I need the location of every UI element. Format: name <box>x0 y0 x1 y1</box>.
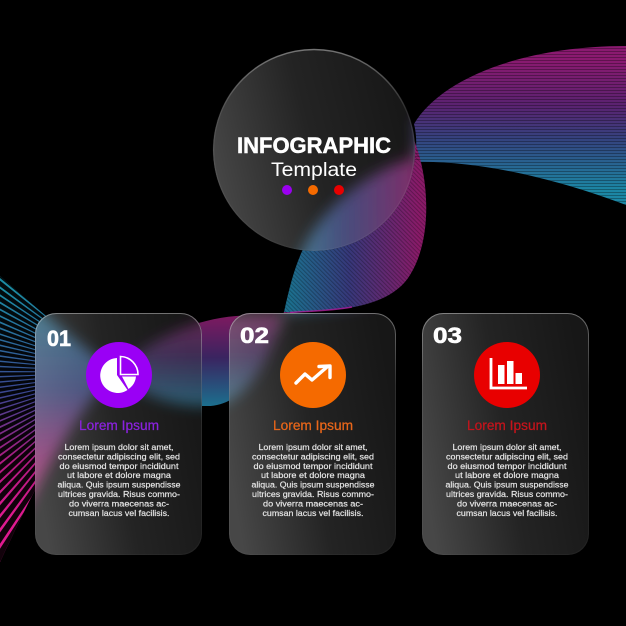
panel: card 03 <box>422 313 589 555</box>
body text: ultrices gravida. Risus commo- <box>252 489 374 499</box>
body text: do eiusmod tempor incididunt <box>60 461 179 471</box>
body text: consectetur adipiscing elit, sed <box>58 451 180 461</box>
panel: card 02 <box>229 313 396 555</box>
icon: bar chart <box>474 342 540 408</box>
body text: ut labore et dolore magna <box>67 470 171 480</box>
heading: Lorem Ipsum <box>79 417 159 433</box>
body text: ut labore et dolore magna <box>455 470 559 480</box>
body text: do eiusmod tempor incididunt <box>448 461 567 471</box>
body text <box>252 442 375 518</box>
body text: do viverra maecenas ac- <box>69 498 169 508</box>
body text: cumsan lacus vel facilisis. <box>262 508 364 518</box>
icon: pie chart <box>86 342 152 408</box>
body text: aliqua. Quis ipsum suspendisse <box>252 480 375 490</box>
body text: aliqua. Quis ipsum suspendisse <box>446 480 569 490</box>
heading: Lorem Ipsum <box>467 417 547 433</box>
panel: card 01 <box>35 313 202 555</box>
body text: consectetur adipiscing elit, sed <box>252 451 374 461</box>
body text: do viverra maecenas ac- <box>457 498 557 508</box>
body text: cumsan lacus vel facilisis. <box>456 508 558 518</box>
body text <box>446 442 569 518</box>
number 03: 03 <box>433 323 462 348</box>
heading: Lorem Ipsum <box>273 417 353 433</box>
title: INFOGRAPHIC <box>237 133 391 158</box>
body text: Lorem ipsum dolor sit amet, <box>64 442 174 452</box>
body text: aliqua. Quis ipsum suspendisse <box>58 480 181 490</box>
body text: ultrices gravida. Risus commo- <box>446 489 568 499</box>
body text: consectetur adipiscing elit, sed <box>446 451 568 461</box>
subtitle: Template <box>271 160 357 181</box>
three coloured dots <box>282 185 344 195</box>
icon: trend arrow <box>280 342 346 408</box>
number 01: 01 <box>47 326 71 351</box>
body text: Lorem ipsum dolor sit amet, <box>258 442 368 452</box>
body text: do viverra maecenas ac- <box>263 498 363 508</box>
body text: Lorem ipsum dolor sit amet, <box>452 442 562 452</box>
panel: title glass circle <box>212 48 416 251</box>
number 02: 02 <box>240 323 269 348</box>
body text: ultrices gravida. Risus commo- <box>58 489 180 499</box>
body text: cumsan lacus vel facilisis. <box>68 508 170 518</box>
body text: ut labore et dolore magna <box>261 470 365 480</box>
body text <box>58 442 181 518</box>
body text: do eiusmod tempor incididunt <box>254 461 373 471</box>
